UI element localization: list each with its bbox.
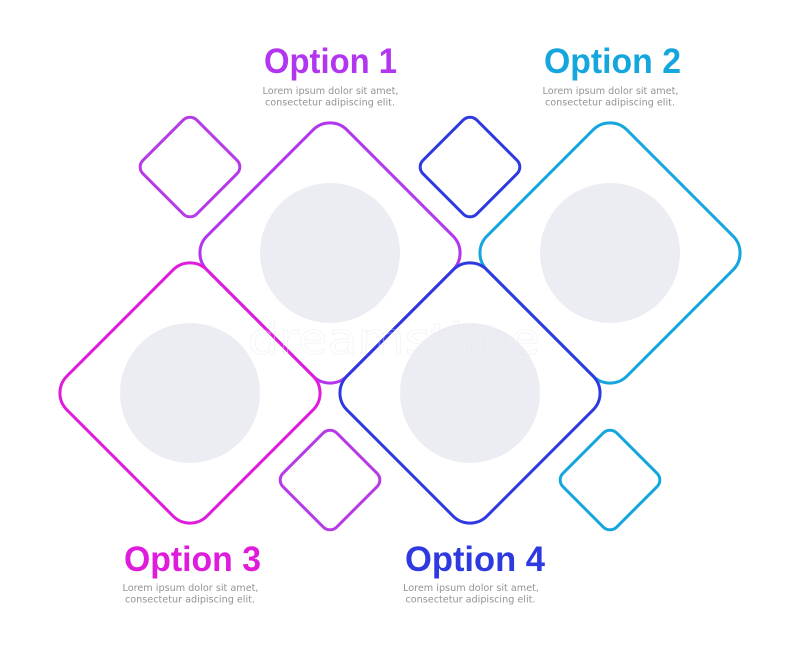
panel: option 1 large diamond <box>190 113 470 393</box>
text block: option 3: consectetur adipiscing elit. <box>125 594 255 606</box>
text block: option 4 <box>403 539 545 606</box>
text block: option 3 <box>122 539 261 606</box>
icon: small purple diamond top left <box>136 113 244 221</box>
text block: option 4: Option 4 <box>405 539 545 579</box>
text block: option 1: consectetur adipiscing elit. <box>265 98 395 108</box>
watermark: dreamstime <box>248 314 540 365</box>
icon: small purple diamond bottom centre <box>276 426 384 534</box>
panel: option 2 large diamond <box>470 113 750 393</box>
text block: option 3: Lorem ipsum dolor sit amet, <box>122 583 258 594</box>
text block: option 3: Option 3 <box>124 539 261 579</box>
panel: option 3 large diamond <box>50 253 330 533</box>
text block: option 1: Lorem ipsum dolor sit amet, <box>262 86 398 97</box>
text block: option 4: Lorem ipsum dolor sit amet, <box>403 583 539 594</box>
text block: option 1: Option 1 <box>264 41 397 81</box>
text block: option 2 <box>542 41 681 108</box>
icon: small blue diamond top centre <box>416 113 524 221</box>
text block: option 2: Lorem ipsum dolor sit amet, <box>542 86 678 97</box>
text block: option 1 <box>262 41 398 108</box>
icon: small cyan diamond bottom right <box>556 426 664 534</box>
panel: option 4 large diamond <box>330 253 610 533</box>
text block: option 2: consectetur adipiscing elit. <box>545 98 675 108</box>
text block: option 2: Option 2 <box>544 41 681 81</box>
text block: option 4: consectetur adipiscing elit. <box>406 594 536 606</box>
